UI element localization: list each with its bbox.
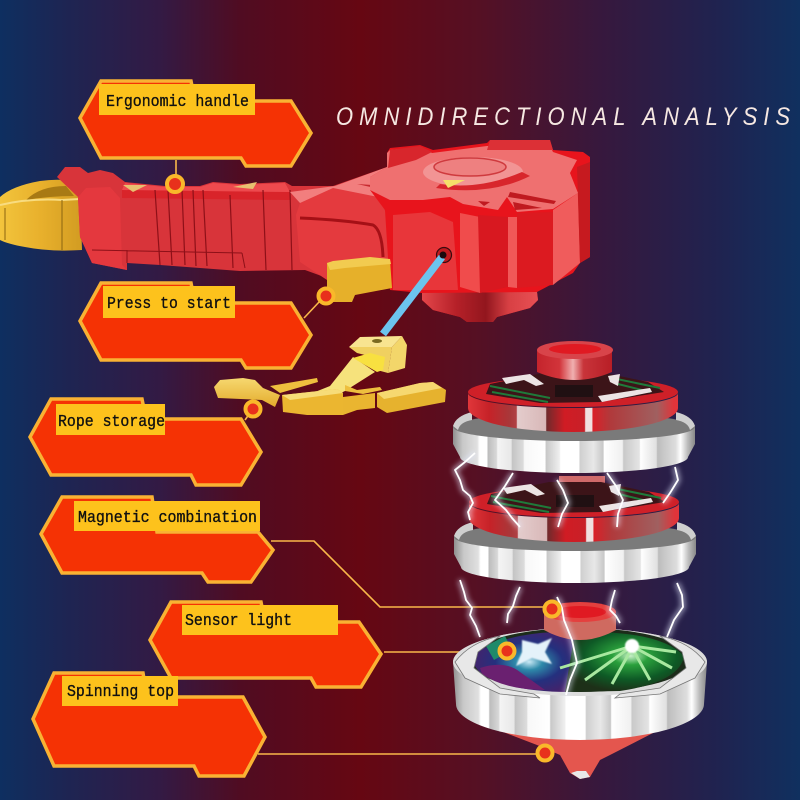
centre disc <box>423 157 523 187</box>
spinning top: lower assembled top <box>453 602 707 779</box>
callout: Sensor light: Sensor light <box>185 612 292 631</box>
red tip <box>503 732 653 779</box>
callout: Press to start <box>80 283 311 368</box>
cube <box>349 347 392 373</box>
central stem <box>300 357 375 398</box>
glowing disc <box>468 628 692 692</box>
lightning arcs <box>455 453 683 695</box>
gold start lever <box>327 257 392 302</box>
callout: Press to start: Press to start <box>107 295 231 314</box>
callout: Spinning top: Spinning top <box>67 683 174 702</box>
gold rip cord handle <box>214 336 446 415</box>
gold pull ring <box>0 180 82 251</box>
marker dot: Press to start <box>318 288 334 304</box>
right arm <box>377 382 446 413</box>
spinning top: middle stacked layer <box>454 476 696 583</box>
launcher head <box>370 140 590 322</box>
marker dot: Magnetic combination <box>544 602 560 616</box>
marker dot: Rope storage <box>246 402 260 416</box>
marker dot: Spinning top <box>538 746 552 760</box>
translucent cap <box>537 341 613 380</box>
head top surface <box>370 146 578 212</box>
callout: Rope storage <box>30 399 261 485</box>
left and right arcs <box>270 378 382 394</box>
callout: Magnetic combination: Magnetic combination <box>78 509 257 528</box>
marker dot: Sensor light <box>500 644 514 658</box>
callout: Magnetic combination <box>41 497 273 582</box>
callout: Sensor light <box>150 602 381 687</box>
upper red cap <box>544 602 616 640</box>
head front faces <box>393 162 590 293</box>
lever housing <box>290 167 423 280</box>
blue rip cord <box>383 248 452 334</box>
grip body <box>57 167 395 278</box>
callout: Spinning top <box>33 673 265 776</box>
callout: Rope storage: Rope storage <box>58 413 165 432</box>
spinning top: upper stacked layer <box>453 341 695 473</box>
ring rim chips <box>455 636 705 698</box>
lower centre block <box>282 389 343 415</box>
left arm <box>214 378 280 407</box>
marker dot: Ergonomic handle <box>167 176 183 192</box>
leader lines <box>176 160 545 754</box>
launcher handle <box>0 140 590 322</box>
title: OMNIDIRECTIONAL ANALYSIS <box>336 103 790 130</box>
callout: Ergonomic handle <box>80 81 311 166</box>
silver ring <box>453 628 707 740</box>
callout: Ergonomic handle: Ergonomic handle <box>106 93 249 112</box>
